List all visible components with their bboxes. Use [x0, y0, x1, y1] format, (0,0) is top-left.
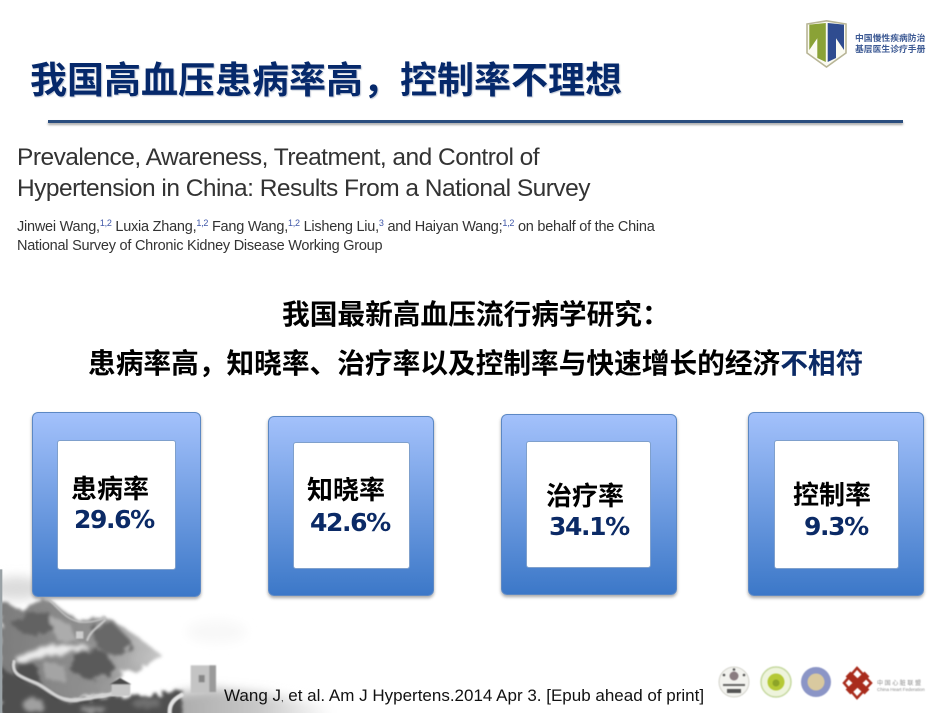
logo: shield and handbook name [806, 20, 926, 68]
label: control: 控制率 [793, 480, 871, 510]
panel: treatment [501, 414, 677, 595]
logo text [855, 33, 926, 54]
subheading line 2: 患病率高，知晓率、治疗率以及控制率与快速增长的经济不相符 [88, 348, 863, 379]
label: treatment: 治疗率 [546, 481, 624, 511]
watchtowers [76, 631, 216, 696]
citation: Wang J, et al. Am J Hypertens.2014 Apr 3. [Epub ahead of print] [224, 686, 704, 705]
partner logos [718, 666, 925, 700]
logo caption [877, 679, 925, 692]
panel: control [748, 412, 924, 596]
panel: prevalence [32, 412, 201, 597]
left edge strip [0, 569, 2, 713]
paper title: Hypertension in China: Results From a National Survey [17, 175, 590, 202]
icon: logo one [719, 667, 749, 697]
subheading line 1: 我国最新高血压流行病学研究： [282, 299, 670, 330]
foreground forest [0, 667, 183, 713]
panel: awareness [268, 416, 434, 596]
icon: china heart federation [844, 668, 871, 698]
panel inner: treatment [526, 441, 651, 568]
title: 我国高血压患病率高，控制率不理想 [30, 60, 622, 101]
logo text: 基层医生诊疗手册 [855, 44, 925, 54]
title underline [48, 120, 903, 123]
paper authors: Jinwei Wang,1,2 Luxia Zhang,1,2 Fang Wang,1,2 Lisheng Liu,3 and Haiyan Wang;1,2 on behalf of the China [17, 218, 655, 235]
paper title [17, 144, 590, 202]
great wall [12, 601, 182, 713]
label: prevalence: 患病率 [71, 474, 149, 504]
logo caption: 中国心脏联盟 [877, 679, 923, 687]
mountain shading [13, 610, 133, 683]
far right lower hills [167, 688, 333, 713]
paper authors [17, 218, 655, 254]
value: prevalence: 29.6% [74, 505, 154, 534]
icon: logo three [801, 667, 831, 697]
value: awareness: 42.6% [310, 508, 390, 537]
background: great wall ink landscape [0, 569, 322, 713]
icon: logo two [761, 667, 791, 697]
mist band across mountain [17, 645, 93, 663]
label: awareness: 知晓率 [307, 475, 385, 505]
panel inner: control [774, 440, 899, 569]
icon: shield [806, 20, 847, 68]
panel inner: awareness [293, 442, 410, 569]
mist layers [0, 577, 43, 600]
paper authors: National Survey of Chronic Kidney Disease Working Group [17, 238, 382, 254]
value: treatment: 34.1% [549, 512, 629, 541]
panel inner: prevalence [57, 440, 176, 570]
value: control: 9.3% [804, 512, 868, 541]
logo text: 中国慢性疾病防治 [855, 33, 925, 43]
paper title: Prevalence, Awareness, Treatment, and Control of [17, 144, 539, 171]
main mountain [0, 600, 163, 700]
logo caption: China Heart Federation [877, 687, 925, 692]
